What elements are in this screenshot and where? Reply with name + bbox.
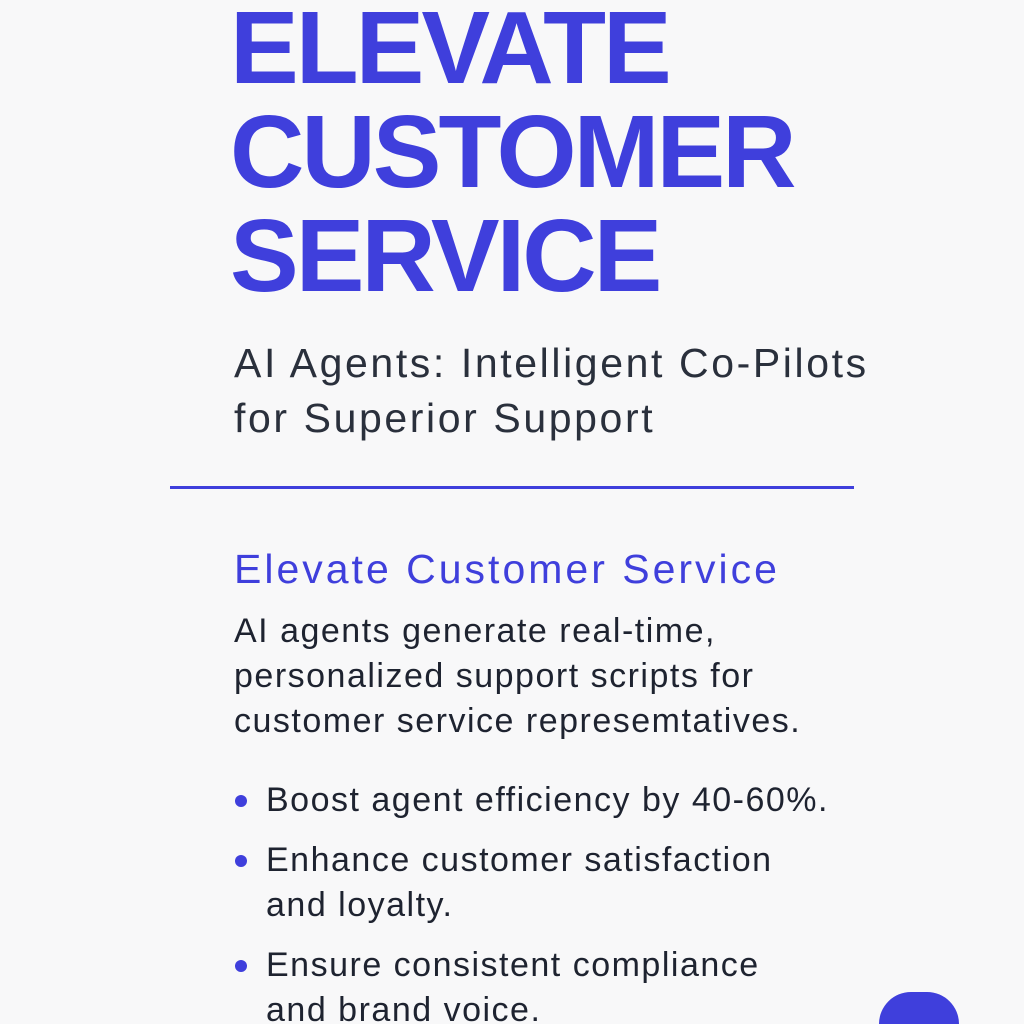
bullet: satisfaction: Enhance customer satisfaction [266, 841, 773, 879]
body text [234, 612, 801, 740]
body text: customer service represemtatives. [234, 702, 801, 740]
bullet: satisfaction [235, 841, 773, 924]
body text: personalized support scripts for [234, 657, 754, 695]
title: CUSTOMER [230, 94, 794, 209]
subtitle: for Superior Support [234, 395, 655, 441]
subtitle: AI Agents: Intelligent Co-Pilots [234, 340, 869, 386]
body text: AI agents generate real-time, [234, 612, 716, 650]
decorative circle button [879, 992, 959, 1024]
bullet: efficiency: Boost agent efficiency by 40-60%. [266, 781, 829, 819]
title: SERVICE [230, 198, 659, 313]
bullet: satisfaction: and loyalty. [266, 886, 453, 924]
bullet: compliance: Ensure consistent compliance [266, 946, 760, 984]
title [230, 0, 794, 313]
divider line [170, 486, 854, 489]
bullet: compliance [235, 946, 760, 1024]
section heading: Elevate Customer Service [234, 546, 780, 592]
subtitle [234, 340, 869, 441]
